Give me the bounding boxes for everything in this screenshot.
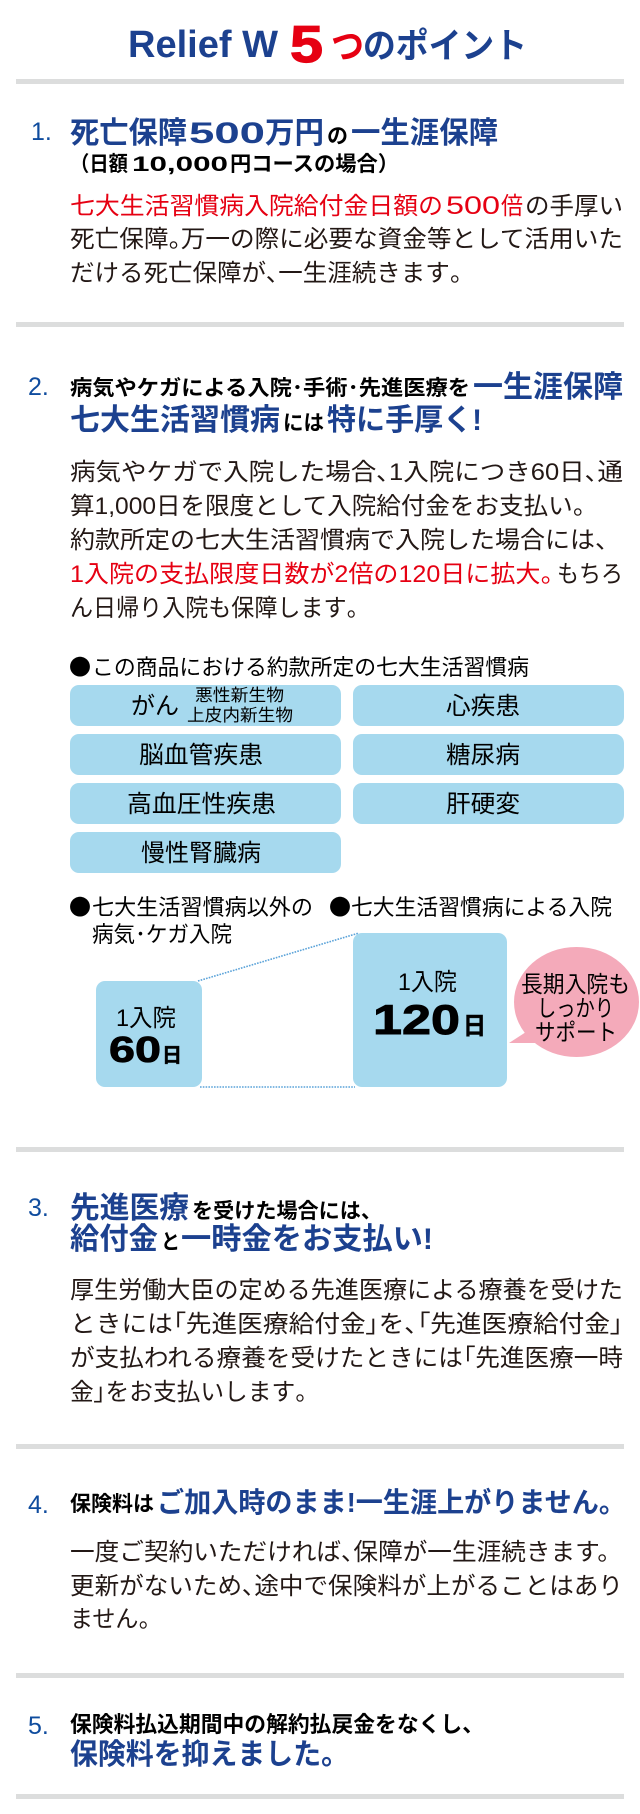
panel: disease list — [70, 685, 624, 873]
box: 120 days: 120 — [373, 996, 460, 1043]
dotted connector lines — [198, 933, 359, 1087]
text block: point 2 body: 約款所定の七大生活習慣病で入院した場合には、 — [70, 527, 620, 554]
heading: point 1: 一生涯保障 — [351, 117, 498, 150]
callout: long stays supported: 長期入院も — [521, 971, 630, 997]
heading: point 5: 保険料を抑えました。 — [70, 1738, 349, 1771]
callout: long stays supported — [509, 947, 639, 1057]
box: 60 days: 日 — [162, 1045, 182, 1067]
text block: point 3 body: が支払われる療養を受けたときには 「先進医療一時 — [70, 1345, 623, 1372]
disease: cancer: 上皮内新生物 — [187, 706, 293, 725]
text block: point 2 body: 1入院の支払限度日数が2倍の120日に拡大 。 — [70, 561, 553, 588]
heading: point 3: を受けた場合には、 — [192, 1200, 382, 1223]
subheading: other hospitalization: 病気･ケガ入院 — [92, 922, 232, 947]
text block: point 2 body: 病気やケガで入院した場合 、1入院につき60日 、通 — [70, 459, 623, 486]
number 2: 2. — [28, 373, 49, 401]
text block: point 1 body — [70, 192, 623, 287]
number 4: 4. — [28, 1491, 49, 1519]
disease: heart — [353, 685, 624, 726]
title: のポイント — [363, 27, 527, 66]
text block: point 4 body: 更新がないため、途中で保険料が上がることはあり — [70, 1573, 623, 1600]
subheading: other hospitalization: 七大生活習慣病以外の — [92, 895, 313, 920]
heading: point 5: 保険料払込期間中の解約払戻金をなくし、 — [70, 1712, 484, 1737]
title: つ — [331, 26, 364, 67]
text block: point 1 body: 七大生活習慣病入院給付金日額の — [70, 193, 443, 220]
panel: point 4 — [28, 1486, 626, 1633]
heading: point 2: 病気やケガによる入院･手術･先進医療を — [70, 376, 470, 400]
subheading: lifestyle disease hospitalization: 七大生活習慣病による入院 — [351, 895, 612, 920]
heading: point 3: 先進医療 — [70, 1192, 189, 1225]
box: 60 days: 60 — [109, 1029, 161, 1070]
text block: point 1 body: 死亡保障。万一の際に必要な資金等として活用いた — [70, 226, 623, 253]
heading: point 1: 万円 — [265, 117, 324, 150]
text block: point 2 body: ん日帰り入院も保障します。 — [70, 595, 358, 622]
text block: point 3 body: ときには 「先進医療給付金 」を、「先進医療給付金 」 — [70, 1311, 623, 1338]
panel: point 3 — [28, 1192, 623, 1406]
box: 60 days — [96, 981, 202, 1087]
disease: hypertension — [70, 783, 341, 824]
disease: cancer — [70, 685, 341, 726]
disease: cancer: 悪性新生物 — [195, 686, 284, 705]
callout: long stays supported: サポート — [535, 1019, 617, 1045]
disease: cirrhosis — [353, 783, 624, 824]
text block: point 4 body: ません。 — [70, 1606, 150, 1633]
number 1: 1. — [31, 118, 52, 146]
title: Relief W — [128, 24, 278, 66]
heading: point 1: 500 — [189, 117, 265, 150]
text block: point 3 body: 金」をお支払いします。 — [70, 1379, 307, 1406]
text block: point 4 body: 一度ご契約いただければ 、保障が一生涯続きます。 — [70, 1539, 622, 1566]
subheading: other hospitalization — [69, 890, 313, 947]
title — [128, 16, 527, 74]
subheading: seven lifestyle diseases: ● — [69, 650, 91, 682]
heading: point 4: ご加入時のまま!一生涯上がりません。 — [157, 1486, 626, 1518]
text block: point 1 body: 倍 — [501, 193, 523, 220]
disease: cirrhosis: 肝硬変 — [446, 791, 520, 818]
disease: cerebrovascular: 脳血管疾患 — [139, 742, 263, 769]
box: 60 days: 1入院 — [116, 1005, 176, 1032]
heading: point 3: 一時金をお支払い! — [181, 1223, 433, 1256]
heading: point 2: 特に手厚く! — [327, 404, 482, 437]
text block: point 1 body: だける死亡保障が、一生涯続きます。 — [70, 260, 462, 287]
disease: heart: 心疾患 — [446, 693, 520, 720]
disease: chronic kidney: 慢性腎臓病 — [141, 840, 261, 867]
disease: hypertension: 高血圧性疾患 — [127, 791, 276, 818]
heading: point 1: の — [327, 125, 348, 148]
heading: point 1: 10,000 — [132, 153, 228, 176]
panel: point 1 — [31, 117, 623, 287]
callout: long stays supported: しっかり — [537, 995, 614, 1021]
disease: cerebrovascular — [70, 734, 341, 775]
text block: point 2 body: もちろ — [557, 561, 623, 588]
panel: point 2 — [28, 371, 639, 1087]
subheading: lifestyle disease hospitalization: ● — [329, 890, 351, 922]
text block: point 4 body — [70, 1539, 623, 1633]
heading: point 1: 死亡保障 — [70, 117, 187, 150]
heading: point 5 — [70, 1712, 484, 1771]
disease: cancer: がん — [131, 693, 179, 720]
text block: point 2 body: 算1,000日を限度として入院給付金をお支払い 。 — [70, 493, 585, 520]
number 5: 5. — [28, 1712, 49, 1740]
subheading: other hospitalization: ● — [69, 890, 91, 922]
panel: point 5 — [28, 1712, 484, 1771]
box: 120 days — [353, 933, 507, 1087]
heading: point 3 — [70, 1192, 433, 1256]
disease: chronic kidney — [70, 832, 341, 873]
comparison chart: 60 vs 120 days — [96, 933, 639, 1087]
heading: point 2: 一生涯保障 — [473, 371, 623, 404]
box: 120 days: 日 — [463, 1013, 486, 1040]
heading: point 4: 保険料は — [70, 1493, 154, 1516]
heading: point 3: 給付金 — [70, 1223, 158, 1256]
disease: diabetes — [353, 734, 624, 775]
disease: diabetes: 糖尿病 — [446, 742, 520, 769]
title: 5 — [290, 16, 323, 74]
text block: point 3 body: 厚生労働大臣の定める先進医療による療養を受けた — [70, 1277, 623, 1304]
number 3: 3. — [28, 1194, 49, 1222]
heading: point 2: には — [283, 412, 324, 435]
heading: point 1: （日額 — [70, 153, 128, 176]
text block: point 3 body — [70, 1277, 623, 1406]
text block: point 1 body: の手厚い — [525, 193, 623, 220]
text block: point 2 body — [70, 459, 623, 622]
text block: point 1 body: 500 — [446, 192, 500, 220]
heading: point 1 — [70, 117, 498, 176]
box: 120 days: 1入院 — [398, 969, 457, 996]
subheading: seven lifestyle diseases: この商品における約款所定の七大生活習慣病 — [92, 655, 529, 680]
heading: point 2: 七大生活習慣病 — [70, 404, 280, 437]
heading: point 2 — [70, 371, 623, 437]
heading: point 3: と — [161, 1231, 180, 1254]
heading: point 1: 円コースの場合） — [230, 153, 399, 176]
